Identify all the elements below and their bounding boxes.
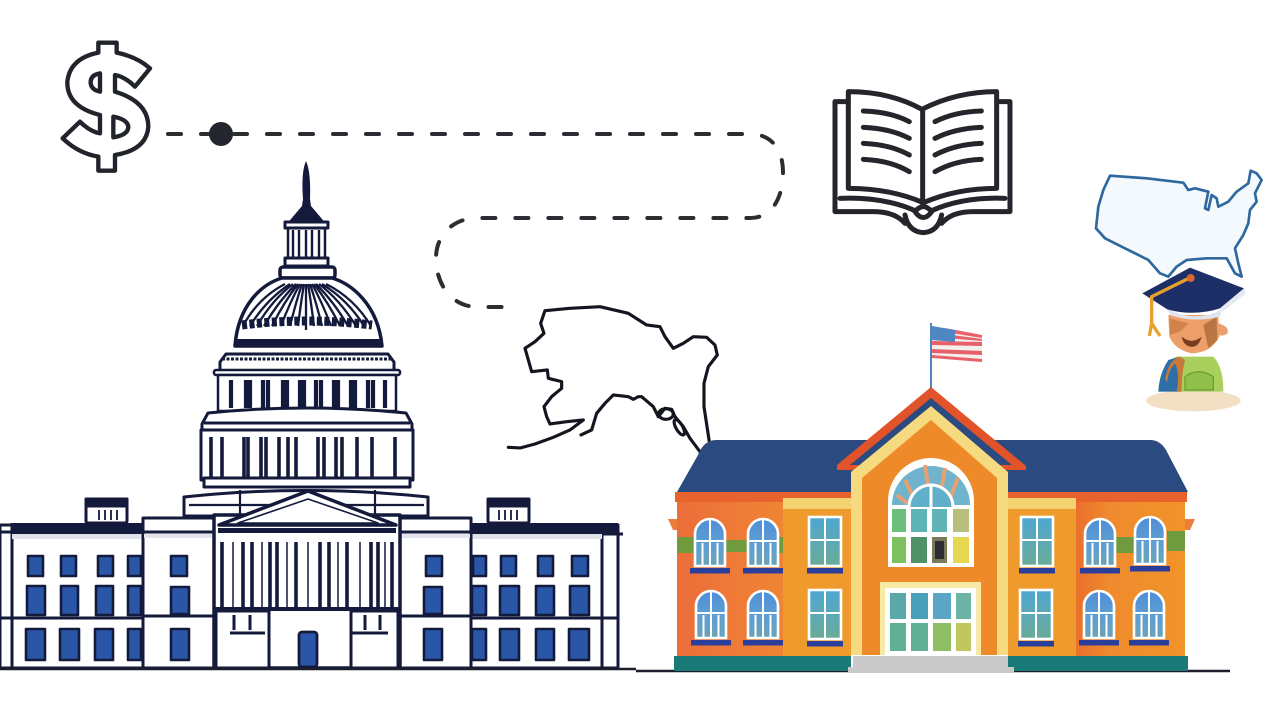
map: Alaska outline [508,307,717,452]
graduation cap [1142,268,1246,336]
terrace [184,490,428,516]
icon: student with graduation cap [1142,268,1246,411]
icon: route start dot [209,122,233,146]
building: US Capitol line art [0,161,623,668]
upper drum [214,354,400,411]
main roof [677,440,1188,492]
right outer wing [471,499,623,668]
icon: dollar sign [63,43,150,171]
arched central window [888,458,974,567]
ground line [0,669,1230,671]
statue and finial [285,161,328,226]
right outer wing windows [472,556,589,660]
face [1168,315,1228,353]
inner wings with windows [143,518,471,668]
entrance steps [848,656,1014,673]
plinth [674,656,1188,671]
dome [235,278,382,346]
left outer wing windows [26,556,141,660]
building: colorful school [668,323,1195,673]
dome lantern [280,222,335,278]
map: contiguous United States outline [1096,171,1262,277]
wings and eave [668,492,1195,658]
platform [1146,390,1241,411]
dashed route line [168,134,783,307]
icon: open book [835,92,1010,233]
left outer wing [0,499,143,668]
body with backpack [1158,357,1223,392]
flag and pole [930,323,982,388]
central portico [214,491,400,668]
school windows [690,517,1170,646]
entrance window [880,582,981,655]
central gable [837,387,1026,655]
lower drum [201,408,413,487]
